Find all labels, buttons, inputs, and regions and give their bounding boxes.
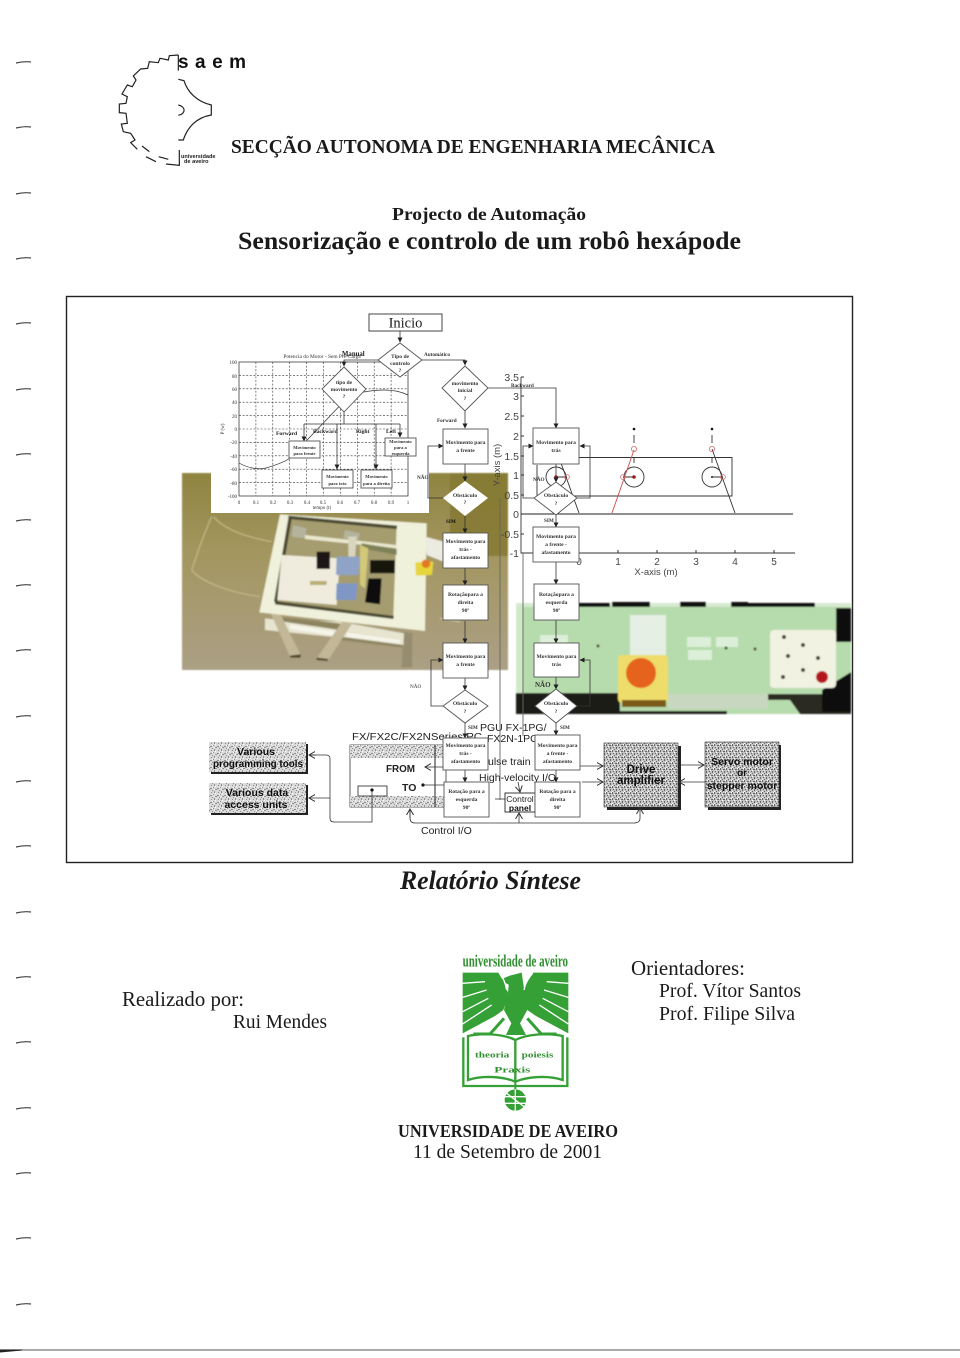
- box: rotação para a esquerda: esquerda: [456, 797, 478, 803]
- drive amplifier box: Drive: [627, 764, 655, 776]
- gait x axis: 3: [693, 557, 699, 568]
- box: rotação para a direita 2: Rotação para a: [539, 789, 576, 795]
- project subtitle: Projecto de Automação: [392, 204, 586, 224]
- x axis ticks: 0.3: [287, 501, 294, 506]
- box: movimento para trás 2: Movimento para: [537, 654, 577, 660]
- box: movimento para a frente afastamento 2: Movimento para: [538, 743, 578, 749]
- diagram: positioning system: [209, 722, 781, 837]
- box: movimento para trás afastamento 2: Movimento para: [446, 743, 486, 749]
- branches: control type: Automático: [424, 352, 450, 358]
- box: movimento para trás afastamento 2: [443, 738, 488, 770]
- chart axis labels: tempo (t): [313, 506, 332, 511]
- box: movimento para trás (manual): Movimento: [326, 474, 349, 479]
- box: movimento para a direita (manual): para a direita: [363, 481, 391, 486]
- x axis ticks: 0: [238, 501, 241, 506]
- box: movimento para a frente afastamento: [533, 527, 579, 562]
- FX series unit: FX/FX2C/FX2NSeries PC: [352, 731, 482, 743]
- box: movimento para a esquerda (manual): [385, 438, 416, 456]
- gait y axis: 3.5: [504, 372, 519, 384]
- box: movimento para a frente afastamento 2: afastamento: [543, 759, 572, 765]
- connectors: [399, 331, 401, 342]
- box: movimento para trás (manual): [322, 470, 353, 488]
- y axis ticks: -20: [230, 441, 237, 446]
- box: movimento para trás afastamento: afastamento: [451, 555, 480, 561]
- right column connectors: [488, 388, 590, 782]
- decision: obstáculo 2: ?: [464, 709, 467, 715]
- y axis ticks: -80: [230, 482, 237, 487]
- gait y axis: 3: [513, 391, 519, 403]
- logo caption universidade de aveiro: [181, 154, 216, 165]
- decision: movimento inicial: inicial: [458, 388, 473, 394]
- gait x axis: X-axis (m): [634, 567, 678, 578]
- decision: movimento inicial: movimento: [452, 381, 479, 387]
- decision: obstáculo 3: Obstáculo: [544, 493, 568, 499]
- x axis ticks: 0.7: [354, 501, 361, 506]
- box: rotação para a esquerda: 90º: [463, 805, 470, 811]
- box: movimento para trás afastamento 2: trás -: [459, 751, 472, 757]
- gait y axis: 2: [513, 431, 519, 443]
- box: movimento para a frente: Movimento para: [446, 440, 486, 446]
- y axis ticks: 100: [230, 361, 238, 366]
- x axis ticks: 0.9: [388, 501, 395, 506]
- box: movimento para a frente afastamento: a frente -: [545, 542, 567, 548]
- box: various programming tools: Various: [237, 746, 275, 758]
- box: rotação para a direita: [443, 585, 488, 620]
- scan margin marks: [16, 62, 31, 1305]
- advisors block: [631, 956, 801, 1025]
- gait y axis: -0.5: [501, 529, 519, 541]
- main title: Sensorização e controlo de um robô hexápode: [238, 228, 741, 255]
- open book: Praxis: [494, 1066, 532, 1075]
- logo wordmark saem: s a e m: [178, 52, 246, 73]
- flowchart: [276, 314, 590, 817]
- pulse train label: ulse train: [488, 756, 531, 768]
- university crest: [463, 952, 568, 1111]
- chart backdrop: [211, 340, 429, 513]
- box: movimento para a frente afastamento 2: [535, 735, 580, 770]
- control I/O label: Control I/O: [421, 825, 472, 837]
- decision: tipo de controlo: Tipo de: [391, 354, 410, 360]
- box: movimento para trás (manual): para trás: [328, 481, 347, 486]
- author block: Rui Mendes: [233, 1011, 327, 1033]
- open book: [463, 1034, 567, 1086]
- flow labels: [410, 383, 570, 731]
- box: movimento para frente (manual): Movimento: [293, 445, 316, 450]
- box: various programming tools: [209, 742, 308, 774]
- box: movimento para a esquerda (manual): para a: [394, 445, 408, 450]
- box: various data access units: [209, 783, 308, 815]
- y axis ticks: 20: [232, 415, 238, 420]
- logo caption universidade de aveiro: de aveiro: [184, 159, 209, 165]
- crest lettering: universidade de aveiro: [463, 952, 568, 971]
- chart axis labels: P (w): [221, 423, 226, 434]
- open book: poiesis: [522, 1050, 554, 1059]
- box: movimento para trás 2: trás: [552, 662, 562, 668]
- box: rotação para a direita: 90º: [462, 608, 469, 614]
- control panel box: panel: [509, 803, 531, 813]
- bottom page edge line: [0, 1350, 960, 1352]
- box: movimento para trás 2: [534, 643, 579, 677]
- chart axis labels: [221, 423, 332, 511]
- decision: obstáculo 1: Obstáculo: [453, 493, 477, 499]
- author block: [122, 987, 327, 1033]
- box: movimento para a frente afastamento 2: a frente -: [547, 751, 568, 757]
- section heading: SECÇÃO AUTONOMA DE ENGENHARIA MECÂNICA: [231, 134, 716, 158]
- box: rotação para a direita: Rotaçãopara a: [448, 592, 483, 598]
- control panel box: [495, 793, 535, 813]
- armillary globe: [505, 1082, 526, 1111]
- flow labels: NÃO: [535, 681, 551, 689]
- gait y axis: 1.5: [504, 451, 519, 463]
- y axis ticks: -100: [228, 495, 237, 500]
- x axis ticks: [238, 501, 410, 506]
- decision: movimento inicial: ?: [464, 396, 467, 402]
- FX series unit: TO: [402, 782, 416, 794]
- author block: Realizado por:: [122, 987, 244, 1011]
- decision: obstáculo 3: ?: [555, 501, 558, 507]
- gait y axis: -1: [510, 548, 519, 560]
- drive amplifier box: amplifier: [617, 775, 665, 787]
- branches: control type: [342, 351, 465, 366]
- start box: Inicio: [389, 316, 422, 332]
- power curve: [239, 390, 408, 469]
- university name: UNIVERSIDADE DE AVEIRO: [398, 1121, 618, 1141]
- signal arrows: [410, 765, 705, 823]
- date: 11 de Setembro de 2001: [413, 1141, 602, 1163]
- gait x axis: 0: [576, 557, 582, 568]
- PGU labels: PGU FX-1PG/: [480, 722, 547, 734]
- box: movimento para trás afastamento 2: afastamento: [451, 759, 480, 765]
- PGU labels: [480, 722, 547, 745]
- box: rotação para a direita 2: [535, 782, 580, 817]
- box: movimento para a frente: a frente: [456, 448, 475, 454]
- flow labels: Forward: [437, 418, 457, 424]
- decision: tipo de controlo: controlo: [390, 361, 410, 367]
- flow labels: SIM: [468, 725, 478, 731]
- chart: motor power: [221, 354, 410, 511]
- box: various data access units: Various data: [226, 787, 288, 799]
- decision: tipo de movimento: ?: [343, 394, 346, 400]
- long guide lines: [500, 498, 523, 800]
- high velocity label: High-velocity I/O: [479, 772, 556, 784]
- box: rotação para a direita: direita: [458, 600, 474, 606]
- manual branch lines: Forward: [276, 431, 298, 437]
- box: rotação para a esquerda 2: 90º: [553, 608, 560, 614]
- flow labels: NÃO: [410, 682, 421, 690]
- panel: collage figure: [66, 296, 852, 862]
- chart: robot gait: [492, 372, 795, 578]
- box: rotação para a esquerda: [444, 782, 489, 817]
- box: movimento para a frente: [443, 429, 488, 464]
- flow labels: SIM: [446, 519, 456, 525]
- advisors block: Prof. Filipe Silva: [659, 1003, 795, 1025]
- flow labels: Backward: [511, 383, 534, 389]
- x axis ticks: 0.6: [337, 501, 344, 506]
- y axis ticks: 60: [232, 388, 238, 393]
- box: rotação para a esquerda 2: [534, 584, 579, 620]
- manual branch lines: Right: [356, 429, 370, 435]
- PGU labels: FX2N-1PG: [487, 733, 538, 745]
- advisors block: Prof. Vítor Santos: [659, 980, 801, 1002]
- servo motor box: Servo motor: [711, 756, 773, 768]
- y axis ticks: [228, 361, 238, 500]
- manual branch lines: [276, 412, 400, 469]
- servo motor box: stepper motor: [707, 780, 777, 792]
- FX series unit: FROM: [386, 763, 415, 775]
- box: rotação para a esquerda 2: Rotaçãopara a: [539, 592, 574, 598]
- gait x axis: 2: [654, 557, 660, 568]
- box: movimento para a esquerda (manual): esquerda: [392, 451, 410, 456]
- robot leg positions: [521, 428, 793, 514]
- y axis ticks: -40: [230, 455, 237, 460]
- FX series unit: [350, 731, 482, 807]
- decision: obstáculo 2: [443, 690, 488, 723]
- decision: obstáculo 4: [535, 689, 577, 723]
- box: movimento para a frente afastamento: Movimento para: [536, 534, 576, 540]
- photo: hexapod robot: [182, 473, 508, 670]
- gait x axis: 5: [771, 557, 777, 568]
- gait y axis: [492, 372, 795, 560]
- box: movimento para frente (manual): [289, 441, 320, 458]
- drive amplifier box: [604, 743, 681, 810]
- box: rotação para a esquerda 2: esquerda: [546, 600, 568, 606]
- box: movimento para trás afastamento: Movimento para: [446, 539, 486, 545]
- x axis ticks: 0.1: [253, 501, 260, 506]
- x axis ticks: 0.2: [270, 501, 277, 506]
- photo: control panel: [516, 602, 851, 714]
- servo motor box: [705, 742, 781, 810]
- gait y axis: 0: [513, 509, 519, 521]
- box: various programming tools: programming tools: [213, 758, 303, 770]
- manual branch lines: Left: [386, 429, 396, 435]
- x axis ticks: 0.4: [304, 501, 311, 506]
- gait y axis: 1: [513, 470, 519, 482]
- box: movimento para a frente afastamento: afastamento: [541, 550, 571, 556]
- start box: [369, 314, 442, 332]
- gait y axis: Y-axis (m): [492, 444, 503, 486]
- flow labels: NÃO: [417, 473, 429, 481]
- decision: tipo de controlo: [378, 343, 422, 377]
- box: movimento para trás: [533, 428, 579, 464]
- x axis ticks: 1: [407, 501, 410, 506]
- decision: obstáculo 2: Obstáculo: [453, 701, 477, 707]
- box: movimento para a frente 2: a frente: [456, 662, 475, 668]
- box: movimento para trás: trás: [551, 448, 561, 454]
- servo motor box: or: [737, 768, 747, 779]
- y axis ticks: -60: [230, 468, 237, 473]
- chart title: Potencia do Motor - Sem Pré-Carga: [283, 354, 361, 360]
- decision: obstáculo 1: [443, 481, 488, 516]
- branches: control type: Manual: [342, 351, 365, 358]
- connector arrowhead: tools: [309, 754, 316, 756]
- gait x axis: [576, 550, 777, 578]
- box: movimento para a direita (manual): Movimento: [365, 474, 388, 479]
- y axis ticks: 40: [232, 401, 238, 406]
- decision: tipo de movimento: [322, 367, 366, 412]
- box: movimento para frente (manual): para frente: [294, 451, 315, 456]
- decision: tipo de movimento: tipo de: [336, 380, 353, 386]
- box: movimento para trás afastamento: [443, 533, 488, 568]
- connectors: programming tools: [309, 755, 372, 822]
- flow labels: SIM: [544, 518, 554, 524]
- decision: tipo de controlo: ?: [399, 368, 402, 374]
- decision: obstáculo 4: ?: [555, 709, 558, 715]
- decision: tipo de movimento: movimento: [331, 387, 358, 393]
- y axis ticks: 80: [232, 375, 238, 380]
- control panel box: Control: [506, 794, 534, 804]
- gait y axis: 0.5: [504, 490, 519, 502]
- logo caption universidade de aveiro: universidade: [181, 154, 216, 160]
- box: movimento para a frente 2: [443, 643, 488, 678]
- gait x axis: 1: [615, 557, 621, 568]
- logo: saem gear: [119, 55, 211, 165]
- flow labels: SIM: [560, 725, 570, 731]
- x axis ticks: 0.5: [320, 501, 327, 506]
- box: movimento para a esquerda (manual): Movimento: [389, 439, 412, 444]
- box: various data access units: access units: [224, 799, 288, 811]
- advisors block: Orientadores:: [631, 956, 745, 980]
- report label: Relatório Síntese: [399, 866, 581, 895]
- x axis ticks: 0.8: [371, 501, 378, 506]
- box: movimento para trás afastamento: trás -: [459, 547, 472, 553]
- box: movimento para trás: Movimento para: [536, 440, 576, 446]
- eagle: [463, 973, 568, 1035]
- y axis ticks: 0: [234, 428, 238, 433]
- gait y axis: 2.5: [504, 411, 519, 423]
- box: rotação para a direita 2: 90º: [554, 805, 561, 811]
- left column connectors: [428, 411, 465, 782]
- gait x axis: 4: [732, 557, 738, 568]
- decision: obstáculo 1: ?: [464, 500, 467, 506]
- decision: obstáculo 3: [534, 482, 577, 515]
- manual branch lines: Backward: [313, 429, 338, 435]
- decision: obstáculo 4: Obstáculo: [544, 701, 568, 707]
- flow labels: NÃO: [533, 475, 545, 483]
- decision: movimento inicial: [442, 366, 488, 411]
- box: movimento para a direita (manual): [361, 470, 392, 488]
- box: movimento para a frente 2: Movimento para: [446, 654, 486, 660]
- open book: theoria: [475, 1050, 510, 1059]
- box: rotação para a direita 2: direita: [550, 797, 566, 803]
- box: rotação para a esquerda: Rotação para a: [448, 789, 485, 795]
